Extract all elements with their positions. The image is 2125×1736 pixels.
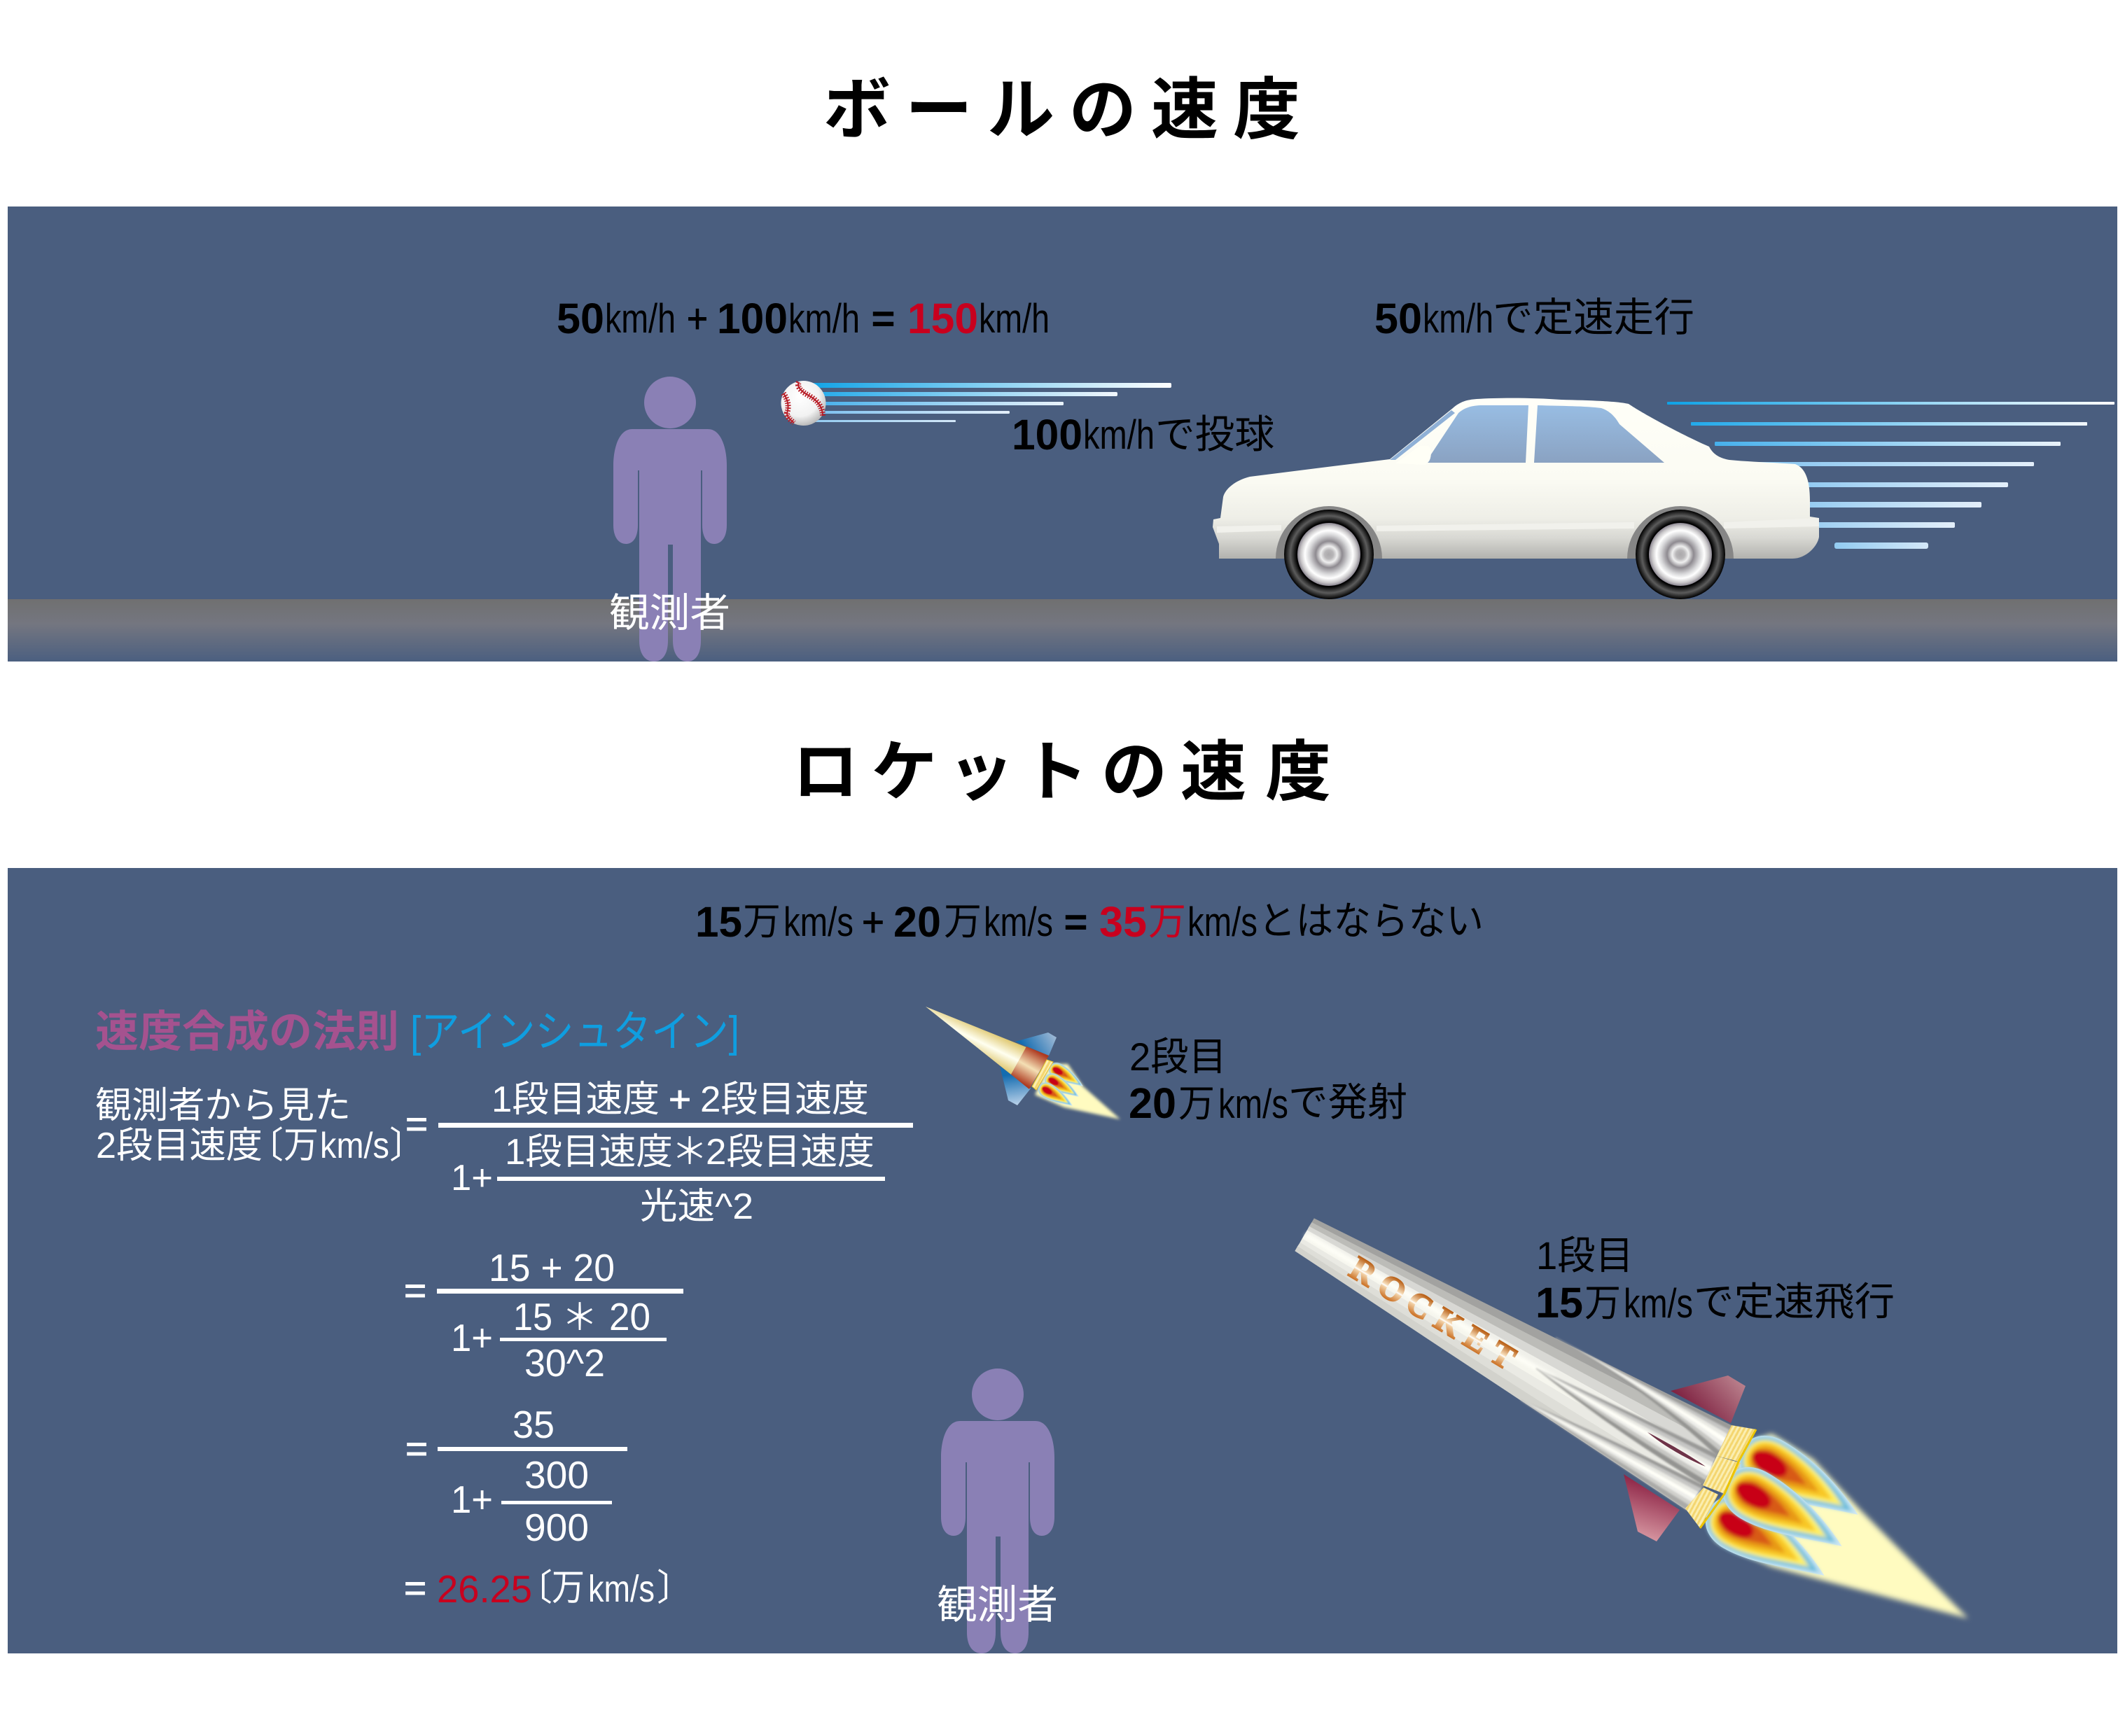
icon: observer figure <box>613 377 727 662</box>
headline: 15 + 20 is not 35: 15 <box>695 898 742 946</box>
formula: result <box>404 1566 693 1611</box>
formula: result: = <box>404 1566 426 1609</box>
headline: 15 + 20 is not 35: 万 <box>944 901 982 943</box>
formula: substitution: 1+ <box>451 1316 493 1359</box>
label: pitch speed: で投球 <box>1155 412 1274 456</box>
label: pitch speed <box>1012 411 1274 458</box>
equation: 50 + 100 = 150 km/h <box>557 295 1050 342</box>
icon: car <box>1213 398 1819 599</box>
label: observer: 観測者 <box>937 1583 1058 1628</box>
headline: 15 + 20 is not 35: + <box>862 899 884 945</box>
formula: general: 〔 <box>247 1126 284 1166</box>
label: second stage: km/s <box>1218 1082 1288 1127</box>
formula: substitution: ＊ <box>562 1298 598 1338</box>
formula: result: 万 <box>552 1568 585 1609</box>
formula: simplification: 35 <box>513 1403 555 1446</box>
formula: substitution: = <box>404 1268 426 1312</box>
formula: result: 〔 <box>516 1568 552 1609</box>
formula: general: 1+ <box>451 1158 493 1198</box>
label: first stage: 1段目 <box>1536 1233 1633 1278</box>
formula: general: 1段目速度 <box>505 1132 673 1172</box>
heading: velocity addition law: 速度合成の法則 <box>95 1008 399 1056</box>
heading: velocity addition law <box>95 1008 739 1056</box>
headline: 15 + 20 is not 35: 20 <box>893 898 941 946</box>
booster: middle <box>1536 1368 1718 1485</box>
equation: 50 + 100 = 150 km/h: km/h <box>788 296 860 342</box>
formula: substitution: 15 + 20 <box>489 1246 615 1289</box>
formula: general: 〕 <box>389 1126 426 1166</box>
equation: 50 + 100 = 150 km/h: 150 <box>907 295 978 342</box>
headline: 15 + 20 is not 35: 35 <box>1099 898 1147 946</box>
headline: 15 + 20 is not 35: 万 <box>1148 901 1186 943</box>
formula: result: 〕 <box>657 1568 693 1609</box>
headline: 15 + 20 is not 35: km/s <box>783 899 854 945</box>
rocket lettering: ROCKET <box>1343 1250 1522 1377</box>
icon: first stage rocket <box>1295 1219 1968 1618</box>
formula: general: = <box>405 1102 428 1145</box>
label: first stage: 15 <box>1535 1279 1583 1326</box>
formula: result: km/s <box>588 1568 655 1610</box>
formula: general: ＊ <box>671 1132 708 1172</box>
booster: upper <box>1556 1338 1732 1456</box>
equation: 50 + 100 = 150 km/h: = <box>872 296 895 342</box>
formula: simplification: 900 <box>524 1506 589 1549</box>
headline: 15 + 20 is not 35: 万 <box>743 901 781 943</box>
label: second stage: で発射 <box>1288 1080 1407 1124</box>
label: second stage <box>1129 1035 1407 1127</box>
formula: substitution: 20 <box>609 1295 650 1338</box>
formula: substitution: 15 <box>513 1295 552 1338</box>
label: car speed: 50 <box>1374 295 1422 342</box>
panel: ball speed <box>8 206 2117 662</box>
label: second stage: 2段目 <box>1129 1035 1227 1079</box>
formula: general: km/s <box>320 1126 389 1166</box>
label: pitch speed: km/h <box>1083 412 1155 458</box>
headline: 15 + 20 is not 35: km/s <box>1187 899 1257 945</box>
formula: general: 2段目速度 <box>96 1126 263 1166</box>
formula: simplification: 300 <box>524 1453 589 1497</box>
formula: simplification <box>405 1403 627 1549</box>
equation: 50 + 100 = 150 km/h: 50 <box>557 295 604 342</box>
formula: general: 2段目速度 <box>706 1132 875 1172</box>
formula: general: + <box>669 1079 691 1120</box>
formula: substitution <box>404 1246 683 1385</box>
label: car speed <box>1374 295 1694 342</box>
formula: simplification: 1+ <box>451 1478 493 1521</box>
formula: general <box>95 1079 913 1227</box>
label: car speed: km/h <box>1423 296 1493 342</box>
formula: substitution: 30^2 <box>524 1341 605 1385</box>
icon: baseball <box>781 381 826 426</box>
title: ロケットの速度: ロケットの速度 <box>793 735 1331 808</box>
headline: 15 + 20 is not 35: km/s <box>984 899 1053 945</box>
label: second stage: 万 <box>1178 1083 1215 1125</box>
car motion streaks <box>1667 402 2114 549</box>
equation: 50 + 100 = 150 km/h: km/h <box>605 296 676 342</box>
formula: general: 万 <box>284 1126 319 1166</box>
equation: 50 + 100 = 150 km/h: 100 <box>717 295 788 342</box>
label: first stage <box>1535 1233 1895 1326</box>
label: first stage: 万 <box>1584 1282 1621 1324</box>
label: pitch speed: 100 <box>1012 411 1082 458</box>
formula: general: 光速^2 <box>640 1186 753 1227</box>
icon: second stage rocket <box>926 1007 1120 1119</box>
ball motion streaks <box>805 383 1171 422</box>
equation: 50 + 100 = 150 km/h: km/h <box>979 296 1050 342</box>
label: second stage: 20 <box>1129 1079 1176 1127</box>
icon: observer figure <box>941 1368 1054 1653</box>
heading: velocity addition law: [アインシュタイン] <box>410 1008 739 1056</box>
title: ボールの速度: ボールの速度 <box>823 73 1300 148</box>
label: first stage: で定速飛行 <box>1694 1280 1895 1324</box>
headline: 15 + 20 is not 35: とはならない <box>1258 899 1484 943</box>
label: car speed: で定速走行 <box>1493 295 1694 340</box>
equation: 50 + 100 = 150 km/h: + <box>687 296 708 342</box>
formula: result: 26.25 <box>437 1567 532 1611</box>
rocket main body <box>1295 1219 1732 1510</box>
label: observer: 観測者 <box>609 591 730 636</box>
panel: rocket speed <box>8 868 2117 1653</box>
label: first stage: km/s <box>1624 1281 1693 1326</box>
formula: general: 観測者から見た <box>95 1086 351 1126</box>
booster: lower <box>1521 1400 1704 1510</box>
formula: general: 1段目速度 <box>492 1079 660 1120</box>
headline: 15 + 20 is not 35 <box>695 898 1484 946</box>
formula: simplification: = <box>405 1427 428 1470</box>
headline: 15 + 20 is not 35: = <box>1064 899 1087 945</box>
formula: general: 2段目速度 <box>700 1079 869 1120</box>
